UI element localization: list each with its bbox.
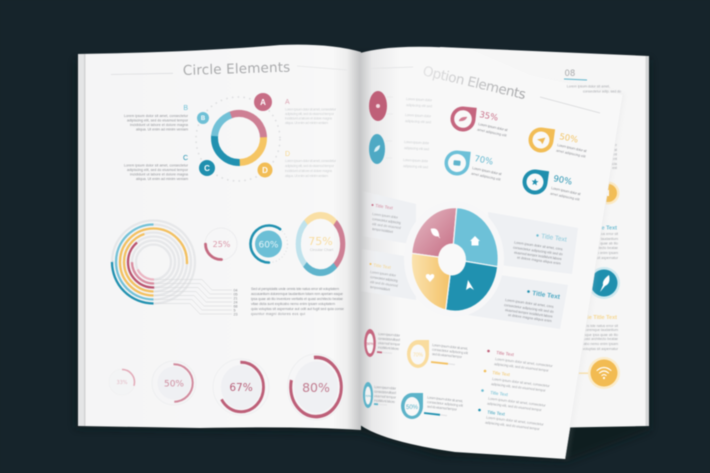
dotted ring <box>196 97 280 181</box>
panel: top-right text box: Lorem ipsum dolor sit amet, cons <box>514 241 563 251</box>
panel: top-right text box: et dolore magna aliqua enim <box>517 256 561 266</box>
segment: blue <box>452 208 498 267</box>
leader labels: 5 <box>234 308 236 312</box>
paragraph under gauges: ipsa quae ab illo inventore veritatis et quasi architecto beatae <box>251 297 343 301</box>
back page text: upper paragraph <box>565 143 617 170</box>
text block B: adipiscing elit, sed do eiusmod tempor <box>127 118 189 122</box>
panel: bottom-left text box: Lorem ipsum dolor <box>370 270 397 278</box>
back page text: blue paragraph: voluptatem quia voluptas sit aspernatur <box>557 256 619 260</box>
heading: Option Elements: Option Elements <box>421 63 528 103</box>
text block A <box>285 99 337 125</box>
icon option: pink oval: Lorem ipsum dolor <box>405 113 432 118</box>
blue teardrop block: consectetur adipiscing elit <box>427 400 463 408</box>
small blue teardrop block <box>363 382 397 408</box>
text block A: incididunt ut labore et dolore magna <box>285 116 332 120</box>
panel: bottom-right text box: Lorem ipsum dolor sit amet, cons <box>505 298 554 309</box>
text block C: C <box>183 155 188 162</box>
small pink teardrop block: eiusmod tempor <box>378 341 401 347</box>
gauge 25% <box>205 228 237 260</box>
leader lines <box>154 280 232 314</box>
panel: bottom-right text box: Title Text <box>532 290 561 301</box>
leader labels <box>234 288 238 316</box>
donut chart with lettered badges <box>196 93 280 181</box>
panel: top-left text box: tempor incididunt <box>372 227 393 234</box>
gauge 75% ring <box>289 204 352 284</box>
leader labels: 04 <box>234 288 238 292</box>
back page text: upper paragraph: nulla pariatur excepteur sint <box>574 152 617 156</box>
panel: bottom-right text box: consectetur adipiscing elit sed do <box>504 303 554 314</box>
panel: bottom-left text box: elit sed do eiusmod <box>370 280 398 288</box>
list item pink <box>487 350 554 373</box>
list item blue: adipiscing elit, sed do eiusmod tempor <box>487 402 543 412</box>
option 35% <box>449 105 508 138</box>
icon: leaf <box>431 229 440 238</box>
icon option: blue oval: Lorem ipsum dolor <box>404 140 430 145</box>
back page heading: yellow title: Simple Title Text <box>574 315 617 321</box>
icon option: pink oval <box>369 91 433 124</box>
donut segments <box>207 106 271 170</box>
panel: bottom-left text box: tempor incididunt <box>370 285 390 292</box>
back page text: upper paragraph: velit esse cillum dolore eu fugiat <box>567 148 617 152</box>
small blue teardrop block: eiusmod tempor <box>374 394 397 400</box>
badge A: A <box>260 98 266 107</box>
badge B: B <box>201 116 206 122</box>
panel: bottom-right text box <box>468 275 568 329</box>
text block B: Lorem ipsum dolor sit amet, consectetur <box>124 114 189 118</box>
teardrop icon <box>449 105 477 133</box>
text block D: incididunt ut labore et dolore magna <box>285 169 332 173</box>
text block D: D <box>285 151 290 158</box>
list item blue <box>481 389 547 412</box>
gauge 25%: 25% <box>213 240 231 249</box>
panel: bottom-left text box <box>360 249 416 300</box>
chart: concentric radial bars <box>112 220 232 314</box>
text block D: adipiscing elit, sed do eiusmod tempor <box>285 164 335 168</box>
yellow teardrop block: Lorem ipsum dolor sit amet, <box>432 343 468 351</box>
badge D: D <box>262 166 268 175</box>
panel: top-left text box: Title Text <box>375 203 394 211</box>
text block D: Lorem ipsum dolor sit amet, consectetur <box>285 159 337 163</box>
text block B: aliqua. Ut enim ad minim veniam <box>136 128 188 132</box>
heading: Circle Elements <box>111 60 347 79</box>
panel: bottom-right text box: et dolore magna aliqua enim <box>508 313 552 323</box>
option 90% <box>521 168 581 202</box>
panel: top-left text box: Lorem ipsum dolor <box>372 212 399 220</box>
option 70% <box>443 149 502 182</box>
panel: top-right text box: consectetur adipiscing elit sed do <box>513 246 563 256</box>
back page text: yellow paragraph: inventore veritatis et quasi architecto beatae <box>550 337 618 341</box>
option 70%: Lorem ipsum dolor sit <box>472 166 502 176</box>
option 50%: Lorem ipsum dolor sit <box>557 143 587 153</box>
list item yellow: adipiscing elit, sed do eiusmod tempor <box>491 382 547 393</box>
back page text: blue paragraph <box>542 232 619 260</box>
icon option: pink oval: adipiscing elit sed <box>406 103 432 108</box>
small pink teardrop block: consectetur elit sed <box>378 337 400 342</box>
gauge 60% <box>250 225 288 263</box>
back page text: upper paragraph: deserunt mollit anim id est <box>576 166 617 170</box>
icon: heart <box>426 274 434 282</box>
panel: top-right text box <box>488 212 578 274</box>
option 35%: amet adipiscing elit <box>477 128 507 138</box>
right front page <box>360 47 623 459</box>
back page text: yellow paragraph: voluptatem accusantium doloremque laudantium <box>543 328 618 332</box>
paragraph under gauges: vitae dicta sunt explicabo nemo enim ipsam voluptatem <box>251 302 335 306</box>
text block C: aliqua. Ut enim ad minim veniam <box>136 177 188 181</box>
icon option: blue oval: adipiscing elit sed <box>404 146 429 151</box>
paragraph under gauges: Sed ut perspiciatis unde omnis iste natus error sit voluptatem <box>251 287 339 291</box>
panel: top-left text box: elit sed do eiusmod <box>372 222 401 230</box>
option 90%: 90% <box>552 174 573 188</box>
back page text: upper paragraph: occaecat cupidatat non proident <box>567 157 617 161</box>
text block A: aliqua. Ut enim ad minim veniam <box>285 121 328 125</box>
paragraph under gauges: quia voluptas sit aspernatur aut odit aut fugit sed quia conse <box>251 307 344 311</box>
segment: yellow <box>411 253 452 310</box>
icon option: pink oval: Lorem ipsum dolor <box>406 97 433 102</box>
yellow teardrop block <box>407 340 468 368</box>
option 70%: 70% <box>473 154 494 168</box>
yellow teardrop block: 70% <box>413 352 424 358</box>
back page text: blue paragraph: voluptatem accusantium doloremque laudantium <box>543 237 618 241</box>
list item pink: Title Text <box>496 350 515 357</box>
back page text: yellow paragraph: totam rem aperiam eaque ipsa quae ab illo <box>552 333 618 337</box>
heading: Option Elements <box>370 63 600 113</box>
small pink teardrop block: 50% <box>366 342 374 346</box>
small blue teardrop block: 70% <box>365 394 371 398</box>
coloured arcs <box>112 220 195 304</box>
option 90%: amet adipiscing elit <box>550 192 580 202</box>
gauge 75% ring: 75% <box>308 235 333 248</box>
option 50% <box>527 126 587 159</box>
leader labels: 24 <box>234 300 238 304</box>
text block B: B <box>183 105 188 112</box>
page number <box>564 69 621 94</box>
segment: pink <box>412 208 457 259</box>
page shadow <box>76 56 650 462</box>
gauge 33% <box>109 369 135 395</box>
small blue teardrop block: consectetur elit sed <box>374 390 396 395</box>
icon: yellow circle <box>596 182 620 204</box>
text block C: adipiscing elit, sed do eiusmod tempor <box>127 168 189 172</box>
icon: teal leaf circle <box>588 267 620 299</box>
gauge 67%: 67% <box>229 382 253 394</box>
page number: consectetur adip, sed do <box>583 90 621 94</box>
list item yellow: Lorem ipsum dolor sit amet, consectetur <box>492 377 551 388</box>
panel: bottom-left text box: Title Text <box>373 263 392 270</box>
icon option: pink oval: adipiscing elit sed <box>405 119 431 124</box>
paragraph under gauges <box>251 287 344 316</box>
list item yellow: Title Text <box>492 370 511 377</box>
leader labels: 23 <box>234 312 238 316</box>
text block D <box>285 151 337 178</box>
yellow teardrop block: consectetur adipiscing elit <box>432 348 468 355</box>
yellow teardrop block: sed do eiusmod tempor <box>432 352 463 359</box>
gauge 60%: 60% <box>258 240 279 250</box>
icon: wifi circle with connector <box>572 357 620 389</box>
back page text: yellow paragraph: voluptatem quia voluptas sit aspernatur <box>557 347 619 351</box>
leader labels: 68 <box>234 304 238 308</box>
icon: arrow <box>466 280 474 290</box>
back page text: yellow paragraph: vitae dicta sunt explicabo nemo enim ipsam <box>550 342 618 346</box>
small pink teardrop block: incididunt labore <box>378 346 399 351</box>
text block A: Lorem ipsum dolor sit amet, consectetur <box>285 108 337 112</box>
option 90%: Lorem ipsum dolor sit <box>551 186 581 196</box>
gauge 50% <box>152 361 196 405</box>
back page text: blue paragraph: vitae dicta sunt explicabo nemo enim ipsam <box>550 251 618 255</box>
left page <box>78 45 361 430</box>
segment: teal <box>446 259 498 311</box>
text block A: adipiscing elit, sed do eiusmod tempor <box>285 112 335 116</box>
list item teal: Title Text <box>487 410 506 417</box>
back page text: blue paragraph: inventore veritatis et quasi architecto beatae <box>550 246 618 250</box>
gauge 33%: 33% <box>116 380 128 386</box>
grey tracks <box>112 220 195 304</box>
page number: Lorem ipsum dolor sit amet, <box>567 84 610 88</box>
paragraph under gauges: accusantium doloremque laudantium totam rem aperiam eaque <box>251 292 343 296</box>
text block B <box>124 105 189 132</box>
list item blue: Lorem ipsum dolor sit amet, consectetur <box>488 397 547 408</box>
back page heading: blue title: Simple Title Text <box>574 226 617 232</box>
paragraph under gauges: quuntur magni dolores eos qui <box>251 312 305 316</box>
leader labels: 21 <box>234 296 238 300</box>
small pink teardrop block: Lorem ipsum dolor <box>378 332 401 338</box>
badge C: C <box>204 164 210 173</box>
icon option: blue oval: adipiscing elit sed <box>403 164 428 169</box>
gauge 50%: 50% <box>164 380 184 390</box>
leader labels: 05 <box>234 292 238 296</box>
text block D: aliqua. Ut enim ad minim veniam <box>285 174 328 178</box>
list item pink: Lorem ipsum dolor sit amet, consectetur <box>495 357 554 368</box>
back page text: upper paragraph: dolor in reprehenderit in voluptate <box>565 143 617 147</box>
icon option: blue oval: Lorem ipsum dolor <box>403 158 429 163</box>
text block C: Lorem ipsum dolor sit amet, consectetur <box>124 164 189 168</box>
back page text: blue paragraph: totam rem aperiam eaque ipsa quae ab illo <box>552 242 618 246</box>
icon option: blue oval <box>369 134 430 169</box>
text block B: incididunt ut labore et dolore magna <box>130 123 188 127</box>
small blue teardrop block: incididunt labore <box>374 399 395 404</box>
back page text: upper paragraph: sunt in culpa qui officia <box>582 162 617 166</box>
pie hole <box>438 244 466 276</box>
panel: top-right text box: Title Text <box>541 233 567 244</box>
panel: bottom-left text box: consectetur adipiscing <box>370 275 398 283</box>
list item blue: Title Text <box>490 390 509 397</box>
option 35%: 35% <box>478 110 499 124</box>
list item teal: adipiscing elit, sed do eiusmod tempor <box>485 421 541 431</box>
panel: top-right text box: eiusmod tempor incididunt labore <box>514 251 562 261</box>
option 35%: Lorem ipsum dolor sit <box>478 122 508 132</box>
back page text: yellow paragraph <box>542 324 619 351</box>
text block C: incididunt ut labore et dolore magna <box>130 172 188 176</box>
blue teardrop block: sed do eiusmod tempor <box>427 405 458 412</box>
small blue teardrop block: Lorem ipsum dolor <box>374 385 397 391</box>
blue teardrop block: 50% <box>406 405 419 411</box>
option 50%: amet adipiscing elit <box>556 149 586 159</box>
option 70%: amet adipiscing elit <box>471 172 501 182</box>
small pink teardrop block <box>364 329 401 357</box>
blue teardrop block <box>401 393 463 419</box>
list item yellow <box>484 370 551 393</box>
back page text: blue paragraph: Sed ut perspiciatis unde omnis iste natus error sit <box>542 232 618 236</box>
text block C <box>124 155 189 181</box>
gauge 75% ring: Circular Chart <box>310 248 334 252</box>
back page text: yellow paragraph: Sed ut perspiciatis unde omnis iste natus error sit <box>542 324 618 328</box>
list item teal: Lorem ipsum dolor sit amet, consectetur <box>486 416 545 427</box>
gauge 67% <box>213 359 269 415</box>
text block A: A <box>285 99 290 106</box>
front page shadow <box>530 80 623 459</box>
back page <box>440 47 649 428</box>
panel: top-left text box <box>362 191 416 245</box>
icon: house <box>470 236 480 246</box>
blue teardrop block: Lorem ipsum dolor sit amet, <box>427 396 463 403</box>
panel: bottom-right text box: eiusmod tempor incididunt labore <box>505 308 553 319</box>
gauge 80%: 80% <box>302 380 330 395</box>
panel: top-left text box: consectetur adipiscing <box>372 217 401 225</box>
heading: Circle Elements: Circle Elements <box>183 60 291 79</box>
gauge 80% <box>288 354 344 420</box>
page number: 08 <box>564 69 575 79</box>
list item teal <box>478 409 545 431</box>
option 50%: 50% <box>558 132 579 146</box>
pie chart <box>404 201 504 317</box>
list item pink: adipiscing elit, sed do eiusmod tempor <box>494 362 550 373</box>
